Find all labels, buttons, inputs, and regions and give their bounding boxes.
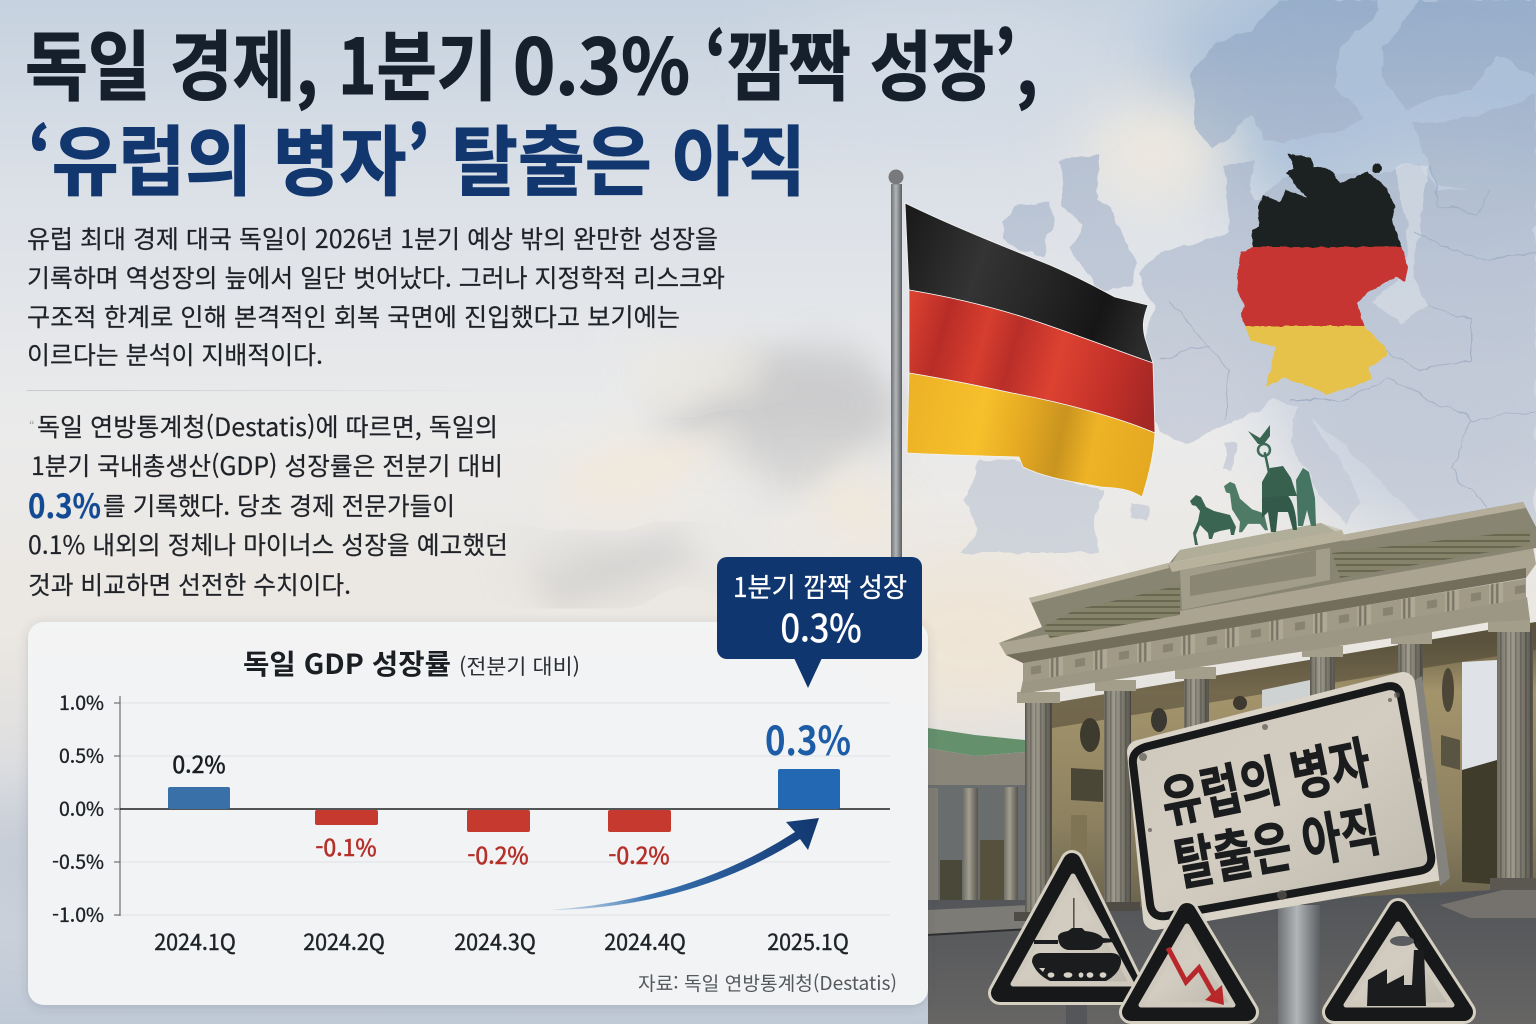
value labels: 0.3% [765,709,851,767]
intro paragraph [27,220,725,372]
cornice [999,547,1536,663]
x axis labels [154,926,849,957]
capitals [1017,620,1530,703]
sign text: 탈출은 아직 [1168,786,1386,902]
icon: tank [1032,898,1121,981]
title: 1분기 [338,6,497,116]
intro paragraph: 유럽 최대 경제 대국 독일이 2026년 1분기 예상 밖의 완만한 성장을 [27,220,718,256]
analysis paragraph: 1분기 국내총생산(GDP) 성장률은 전분기 대비 [31,447,503,483]
architrave [1020,597,1530,694]
sign wear marks [1139,692,1422,900]
analysis paragraph: 독일 연방통계청(Destatis)에 따르면, 독일의 [37,408,498,444]
chart title: 독일 GDP 성장률 [243,643,451,683]
germany map in flag colours [1236,154,1408,395]
growth arrow [550,818,819,910]
source note: 자료: 독일 연방통계청(Destatis) [638,969,897,996]
callout: 1분기 깜짝 성장 [733,566,907,605]
flagpole [888,170,904,559]
warning sign: factory [1334,910,1464,1012]
x axis labels: 2024.4Q [604,926,686,957]
chart panel [28,622,928,1005]
title: 독일 경제, [25,6,318,116]
y axis labels: 0.5% [59,740,104,769]
y axis labels: -0.5% [52,846,104,875]
wall details [1071,668,1460,860]
callout: 0.3% [780,598,862,653]
y axis labels: 0.0% [59,793,104,822]
title [25,6,1038,211]
attic [999,502,1536,643]
x axis labels: 2024.1Q [154,926,236,957]
analysis paragraph [28,408,508,602]
x axis labels: 2025.1Q [767,926,849,957]
value labels: 0.2% [172,746,226,780]
main road sign [1133,676,1450,918]
brandenburg gate [928,502,1536,1024]
road and pavement [928,880,1536,1024]
sign text [1153,718,1386,902]
warning sign: tank [1000,862,1136,1024]
main sign post [1278,905,1320,1024]
columns [1014,630,1536,921]
callout [717,557,922,688]
title: 0.3% [513,6,690,116]
sign text: 유럽의 병자 [1153,718,1377,840]
chart title: (전분기 대비) [459,651,580,681]
analysis paragraph: “ [29,417,35,434]
gate walls [1040,622,1536,912]
analysis paragraph: 를 기록했다. 당초 경제 전문가들이 [103,487,455,523]
intro paragraph: 기록하며 역성장의 늪에서 일단 벗어났다. 그러나 지정학적 리스크와 [27,259,725,295]
value labels: -0.1% [315,829,377,863]
value labels [172,709,851,871]
y axis labels: 1.0% [59,687,104,716]
analysis paragraph: 0.1% 내외의 정체나 마이너스 성장을 예고했던 [28,526,508,562]
frieze [1023,578,1526,682]
icon: factory [1367,936,1426,1006]
title: 탈출은 아직 [451,101,806,211]
sky gap and trees [1262,680,1310,735]
value labels: -0.2% [467,837,529,871]
warning sign: falling chart [1131,912,1247,1012]
title: ‘유럽의 병자’ [28,101,430,211]
analysis paragraph: 것과 비교하면 선전한 수치이다. [28,566,351,602]
left colonnade [928,728,1025,918]
quadriga statue [1190,425,1316,545]
german flag [905,203,1155,497]
analysis paragraph: 0.3% [28,480,101,528]
icon: red falling arrow [1168,948,1224,1005]
title: ‘깜짝 성장’, [705,6,1038,116]
x axis labels: 2024.2Q [303,926,385,957]
x axis labels: 2024.3Q [454,926,536,957]
value labels: -0.2% [608,837,670,871]
y axis labels [52,687,104,928]
chart title [243,643,580,683]
intro paragraph: 이르다는 분석이 지배적이다. [27,336,323,372]
intro paragraph: 구조적 한계로 인해 본격적인 회복 국면에 진입했다고 보기에는 [27,298,680,334]
bars [168,769,840,832]
europe map watermark [960,0,1536,553]
y axis labels: -1.0% [52,899,104,928]
